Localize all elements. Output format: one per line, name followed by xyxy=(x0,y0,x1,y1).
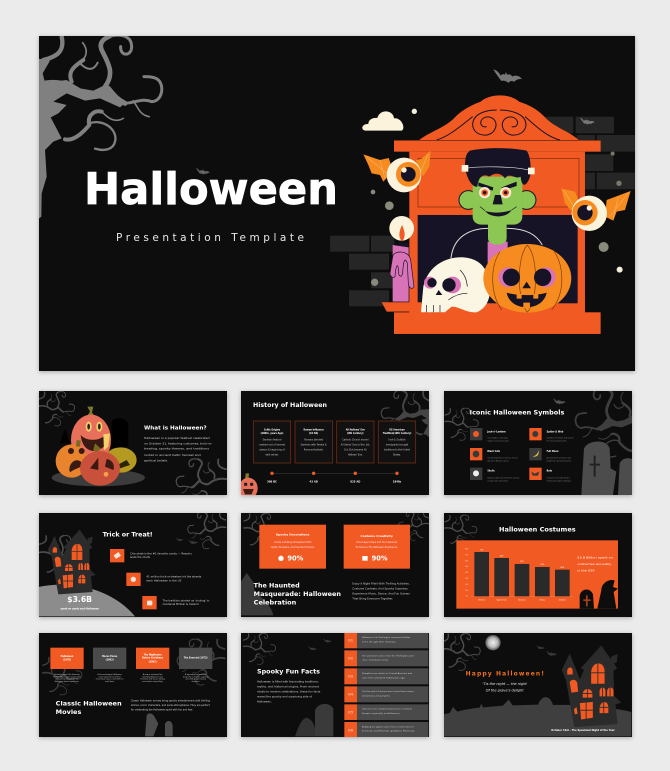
bar chart: 0% xyxy=(466,596,469,598)
symbol list: Symbolize the delicate web between xyxy=(547,437,574,440)
timeline cards: Roman Influence xyxy=(303,428,324,431)
paragraph: Classic Halloween movies bring spooky entertainment with thrilling xyxy=(131,699,210,703)
movie cards: Babysitting that defines the xyxy=(55,678,79,681)
moon xyxy=(485,635,501,650)
card: costume creativity: 90% xyxy=(372,554,388,562)
fact list: The tradition started as 'souling' in xyxy=(163,598,210,602)
candle xyxy=(382,216,422,312)
decoration xyxy=(43,639,225,736)
symbol list: heightened supernatural activity xyxy=(547,459,571,462)
movie cards: small town. xyxy=(105,680,115,683)
panel: spooky fun facts xyxy=(241,633,429,738)
symbol list: Jack-o'-Lantern xyxy=(486,430,506,433)
heading: Trick or Treat! xyxy=(103,531,153,538)
symbol list: bad luck in Medieval cultures xyxy=(487,459,509,462)
chart panel xyxy=(456,540,618,609)
heading xyxy=(254,582,341,606)
timeline cards: traditions to the United xyxy=(384,448,411,451)
callout: $3.8 Billion spent on xyxy=(577,556,613,560)
heading: Halloween Costumes xyxy=(499,527,576,534)
heading: Spooky Fun Facts xyxy=(257,669,321,675)
gravestones xyxy=(581,441,635,495)
icon: flying eyeball right xyxy=(561,188,631,231)
paragraph: spiritual beliefs. xyxy=(144,459,168,463)
timeline cards: All Hallows' Eve xyxy=(346,428,365,431)
bar chart: 80% xyxy=(465,548,469,550)
paragraph: treating, spooky themes, and traditions xyxy=(144,447,210,451)
panel: what is Halloween xyxy=(39,391,227,507)
icon: bats xyxy=(493,69,595,125)
timeline cards: Celtic Origins xyxy=(264,428,281,431)
movie cards: A legendary horror movie xyxy=(185,673,206,676)
poem: 'Tis the night — the night xyxy=(483,682,527,686)
symbol list: on altars and in decorations xyxy=(487,479,508,482)
paragraph: Halloween is filled with fascinating traditions, xyxy=(257,679,319,683)
fact rows: Halloween is the 2nd largest commercial holiday xyxy=(362,636,411,639)
fact rows: Pumpkins are native to Central America and xyxy=(362,672,412,675)
heading: Iconic Halloween Symbols xyxy=(470,410,565,417)
panel: history of Halloween xyxy=(239,391,434,499)
bar chart: 40% xyxy=(465,572,469,574)
bar chart: 50% xyxy=(540,564,545,566)
hill xyxy=(38,585,135,616)
card: costume creativity: Costume Creativity xyxy=(361,534,393,538)
fact list: Chocolate is the #1 favorite candy — Reese's xyxy=(130,551,192,555)
movie cards: returning to cause a mischief in a xyxy=(96,678,124,681)
brick wall xyxy=(330,117,635,306)
symbol list: Skulls xyxy=(487,470,495,473)
timeline: 1840s xyxy=(393,480,402,484)
symbol list: Bats xyxy=(547,470,553,473)
movie cards: and chilling supernatural xyxy=(185,678,206,681)
gravestones xyxy=(580,580,618,609)
card: costume creativity xyxy=(344,525,410,569)
movie cards: (1978) xyxy=(63,658,71,661)
timeline: 500 BC xyxy=(267,480,277,484)
pumpkin group xyxy=(52,407,145,486)
timeline xyxy=(267,472,402,484)
paragraph xyxy=(352,582,410,600)
trees and bats xyxy=(40,512,226,576)
movie cards: and creative storytelling. xyxy=(142,680,163,683)
movie cards: Hocus Pocus xyxy=(102,655,118,658)
paragraph: Costume Contests, And Spooky Surprises. xyxy=(352,587,409,591)
icon: flying eyeball left xyxy=(363,151,431,192)
fact rows: and potatoes, not pumpkins. xyxy=(362,694,391,697)
timeline cards: (43 AD) xyxy=(309,432,318,435)
paragraph: Halloween is a popular festival celebrated xyxy=(144,436,210,440)
timeline cards: (2000+ years Ago) xyxy=(261,432,283,435)
fact rows: Bobbing for apples came from a Celtic harvest xyxy=(362,725,414,728)
heading: The Haunted xyxy=(254,582,300,589)
fact rows: The word witch comes from the Old English word xyxy=(362,654,414,657)
bar chart: 30% xyxy=(465,578,469,580)
symbol list: witches and vampire mythology xyxy=(547,479,571,482)
timeline cards: States. xyxy=(393,453,401,456)
card: spooky decorations: 90% xyxy=(287,554,304,562)
movie cards: blending Halloween and xyxy=(143,676,163,678)
timeline cards: Pomona festivals. xyxy=(304,448,324,451)
tree xyxy=(380,391,429,438)
timeline cards xyxy=(253,421,416,463)
paragraph: reveal the spooky and surprising side of xyxy=(257,695,312,699)
symbol list: Black Cats xyxy=(487,450,501,453)
tree xyxy=(445,515,477,546)
bar chart: 70% xyxy=(465,554,469,556)
movie cards: Halloween xyxy=(61,655,74,658)
decoration xyxy=(241,512,428,615)
pumpkin character xyxy=(241,473,258,495)
timeline cards: marked end of harvest xyxy=(259,443,285,446)
title: Halloween xyxy=(84,164,338,215)
paragraph xyxy=(131,699,210,711)
paragraph xyxy=(257,679,321,704)
timeline cards: Samhain festival xyxy=(263,439,282,442)
timeline cards: season & beginning of xyxy=(259,448,285,451)
skull xyxy=(421,257,490,312)
movie cards: (1993) xyxy=(149,660,157,663)
card: spooky decorations: Lights, Pumpkins, And Haunted Themes. xyxy=(271,546,315,549)
paragraph: myths, and historical origins. From ancient xyxy=(257,684,319,688)
heading xyxy=(56,700,122,716)
fact rows: 06 xyxy=(348,728,354,732)
callout: costumes annually xyxy=(577,562,612,566)
fact rows: 03 xyxy=(348,675,354,679)
timeline cards: Oct 31st became All xyxy=(344,448,367,451)
heading: Celebration xyxy=(254,599,296,606)
statistic: $3.6B xyxy=(67,595,92,604)
bar chart: Witches xyxy=(478,599,485,602)
bar chart: Ghosts xyxy=(539,599,545,602)
timeline cards: US American xyxy=(389,428,405,431)
fact rows: 05 xyxy=(348,710,354,714)
movie cards: Before Christmas xyxy=(142,657,164,660)
timeline: 43 AD xyxy=(310,480,318,484)
panel: classic movies xyxy=(39,633,227,737)
bar chart: Zombies xyxy=(559,600,566,602)
fact rows: Europe, especially on Halloween. xyxy=(362,712,401,715)
bar chart: 55% xyxy=(520,561,524,563)
symbol list xyxy=(470,428,574,482)
icon: cloud xyxy=(362,111,403,131)
symbol list: Considered familiars to witches, omen of xyxy=(487,456,518,459)
movie cards: A unique animated film xyxy=(143,673,163,676)
callout: in the USA xyxy=(577,568,595,572)
poem: Of the grave's delight xyxy=(486,688,524,692)
bar chart xyxy=(465,548,573,602)
timeline cards: Hallows' Eve. xyxy=(348,453,363,456)
fact rows: were first cultivated 9,000 years ago. xyxy=(362,676,406,679)
paragraph: Enjoy A Night Filled With Thrilling Activities, xyxy=(352,582,410,586)
fact list: medieval Britain & Ireland xyxy=(163,602,199,606)
heading: History of Halloween xyxy=(253,402,327,409)
timeline cards: dark winter. xyxy=(265,453,279,456)
fact list xyxy=(110,549,210,609)
heading: Masquerade: Halloween xyxy=(254,591,341,598)
fact rows: 01 xyxy=(348,639,354,643)
bar chart: 65% xyxy=(500,555,504,557)
footer note: October 31st – The Spookiest Night of the Year xyxy=(551,729,616,732)
panel: Halloween costumes xyxy=(444,513,632,617)
bar chart: 45% xyxy=(560,567,565,569)
bar chart: 10% xyxy=(465,590,469,592)
fact rows: Owls were once considered bad omens in medieval xyxy=(362,708,412,711)
movie cards: A slasher horror film featuring xyxy=(55,673,79,676)
symbol list: the living and spirit worlds xyxy=(547,440,567,443)
symbol list: Carved lights to ward away xyxy=(487,437,508,440)
bar chart: 60% xyxy=(465,560,469,562)
fact list: 41 million trick-or-treaters hit the streets xyxy=(146,575,202,579)
heading: Happy Halloween! xyxy=(466,671,544,678)
paragraph: on October 31, featuring costumes, trick-or- xyxy=(144,441,213,445)
panel: closing slide xyxy=(442,633,632,737)
movie cards: A fun and magical Halloween xyxy=(98,673,122,676)
card: spooky decorations xyxy=(259,525,326,569)
heading: What is Halloween? xyxy=(144,426,207,432)
movie cards: known for its intense suspense xyxy=(183,675,208,678)
paragraph xyxy=(144,436,213,463)
bar chart: 75% xyxy=(480,549,484,551)
timeline cards: Romans blended xyxy=(304,439,324,442)
panel: haunted masquerade xyxy=(241,512,429,617)
symbol list: Full Moon xyxy=(547,450,559,453)
timeline cards: (9th Century) xyxy=(347,432,364,435)
paragraph: stories, iconic characters, and eerie atmospheres. They are perfect xyxy=(131,703,210,707)
timeline cards: Samhain with Feralia & xyxy=(301,443,327,446)
movie cards: The Nightmare xyxy=(144,653,162,656)
fact list: each Halloween in the US xyxy=(146,578,182,582)
fact list: leads the charts xyxy=(130,555,151,559)
window frame xyxy=(394,95,601,334)
heading: Classic Halloween xyxy=(56,700,122,707)
pumpkin xyxy=(483,244,571,313)
movie cards: The Exorcist (1973) xyxy=(184,657,208,660)
bar chart: Vampires xyxy=(518,599,526,602)
tree: top left xyxy=(37,35,162,220)
paragraph: for celebrating the Halloween spirit with fun and fear. xyxy=(131,707,193,711)
haunted house xyxy=(48,530,96,594)
timeline cards: Tradition(19th Century) xyxy=(383,432,411,435)
movie cards: Christmas with music, fantasy xyxy=(140,678,165,681)
paragraph: rituals to modern celebrations, these fun facts xyxy=(257,689,321,693)
fact rows: 'wicce,' meaning wise woman. xyxy=(362,660,389,662)
statistic: spent on candy each Halloween xyxy=(60,608,99,611)
panel: title slide xyxy=(37,35,635,371)
timeline: 835 AD xyxy=(350,480,360,484)
paragraph: That Bring Everyone Together. xyxy=(352,596,393,600)
panel: trick or treat xyxy=(38,512,227,617)
fact rows xyxy=(344,633,428,738)
icon: small bat xyxy=(196,168,210,175)
timeline cards: Irish & Scottish xyxy=(388,439,406,442)
heading: Movies xyxy=(56,709,82,716)
fact rows: in the US, right after Christmas. xyxy=(362,640,397,643)
movie cards: movie about three witches xyxy=(99,675,121,678)
card: costume creativity: To Enhance The Halloween Experience. xyxy=(356,546,398,549)
character: Frankenstein xyxy=(451,148,542,265)
subtitle: Presentation Template xyxy=(116,232,304,244)
bar chart: Superheroes xyxy=(496,599,507,602)
fact rows: festival and Roman goddess Pomona. xyxy=(362,730,416,733)
graveyard hill xyxy=(444,697,631,736)
fact rows: The first jack-o'-lanterns were carved from turnips xyxy=(362,690,414,693)
movie cards: Halloween horror experience. xyxy=(55,680,80,683)
symbol list: Associated with werewolves and xyxy=(547,456,571,459)
bar chart: 20% xyxy=(465,584,469,586)
fact rows: 02 xyxy=(348,657,354,661)
paragraph: rooted in ancient Celtic harvest and xyxy=(144,453,201,457)
panel: iconic symbols xyxy=(444,388,651,499)
fact rows: 04 xyxy=(348,692,354,696)
timeline cards: immigrants brought xyxy=(386,443,408,446)
symbol list: negative, mischievous spirits xyxy=(487,440,509,443)
paragraph: Halloween. xyxy=(257,700,272,704)
trees and bat xyxy=(445,388,651,499)
illustration: Frankenstein in window xyxy=(330,69,635,334)
card: spooky decorations: Create A Chilling Atmosphere With xyxy=(274,541,312,544)
bar chart: 50% xyxy=(465,566,469,568)
poem xyxy=(483,682,527,692)
symbol list: Creatures of the night linked to xyxy=(547,476,570,479)
dots xyxy=(371,109,623,286)
timeline cards: All Saints' Day to Nov 1st; xyxy=(341,443,370,446)
symbol list: Spider & Web xyxy=(547,430,564,433)
callout xyxy=(577,556,613,572)
card: costume creativity: Encourage Unique And Fun Costumes xyxy=(356,541,398,544)
symbol list: Represent death and the afterlife; common xyxy=(487,476,520,479)
tree xyxy=(442,634,480,670)
trees xyxy=(39,392,226,507)
timeline cards: Catholic Church moved xyxy=(342,439,369,442)
statistic xyxy=(60,596,99,610)
movie cards xyxy=(50,648,212,683)
movie cards: Michael Myers and a suspenseful xyxy=(53,675,81,678)
card: spooky decorations: Spooky Decorations xyxy=(276,532,310,536)
haunted house xyxy=(562,646,621,727)
decoration xyxy=(244,633,333,736)
movie cards: (1993) xyxy=(106,658,114,661)
bats xyxy=(536,645,557,656)
paragraph: Experience Music, Dance, And Fun Games xyxy=(352,591,410,595)
movie cards: elements. xyxy=(192,680,200,683)
